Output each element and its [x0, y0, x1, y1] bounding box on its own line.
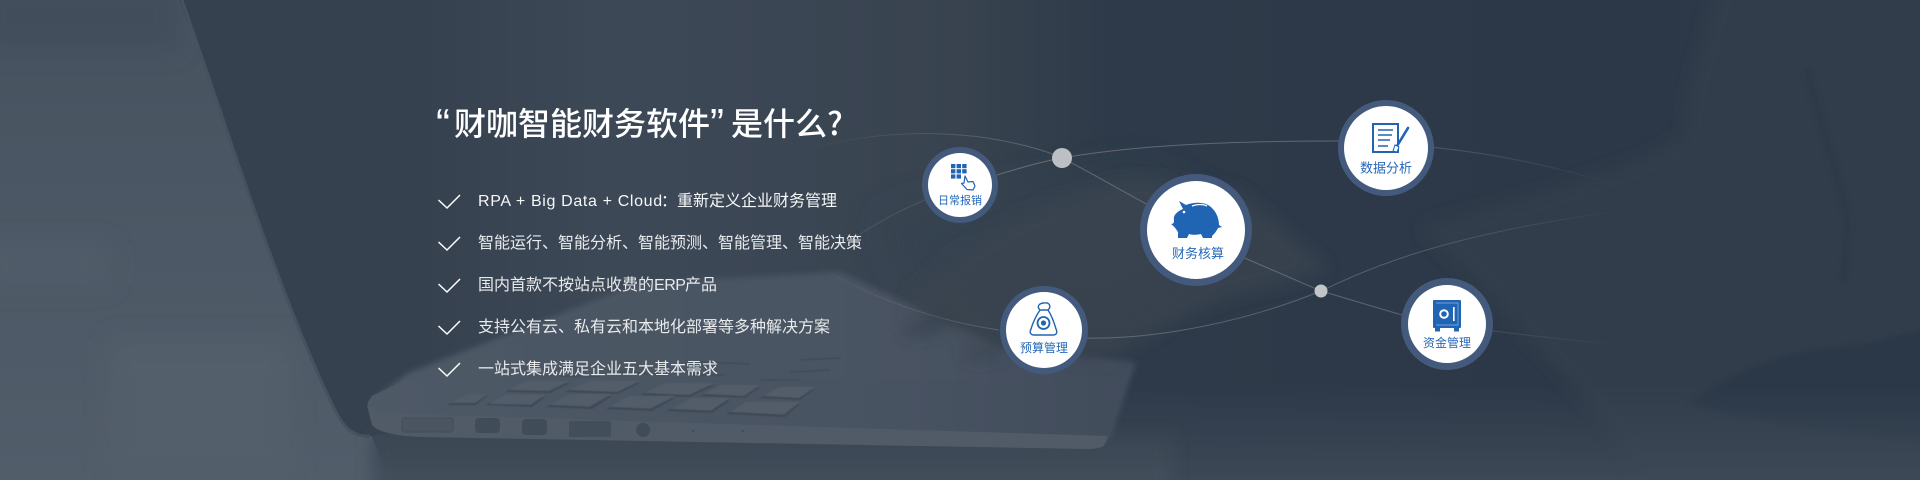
icon: document and pen — [1373, 124, 1411, 152]
background: laptop lid — [180, 0, 372, 436]
icon: piggy bank — [1171, 201, 1222, 238]
background: floor on the right — [1100, 385, 1920, 480]
background: floor below the laptop — [372, 436, 1172, 480]
icon: keypad and hand — [951, 164, 975, 190]
icon: safe — [1433, 300, 1461, 332]
check icon 2 — [438, 237, 460, 250]
title: “ — [436, 100, 450, 147]
background: right hand shadow lines — [1688, 67, 1920, 445]
icon: money bag — [1030, 303, 1057, 335]
background: laptop front edge and ports — [367, 405, 1108, 449]
list item 4: 支持公有云、私有云和本地化部署等多种解决方案 — [478, 318, 830, 336]
label: 数据分析 — [1360, 158, 1412, 176]
background: keyboard keys — [447, 358, 840, 417]
label: 资金管理 — [1423, 334, 1471, 351]
label: 预算管理 — [1020, 339, 1068, 356]
background: right hand silhouette — [1419, 0, 1920, 480]
node dot lower — [1314, 284, 1328, 298]
node: 预算管理 — [1000, 286, 1088, 374]
label: 日常报销 — [938, 192, 982, 208]
list item 5: 一站式集成满足企业五大基本需求 — [478, 360, 718, 378]
background: laptop deck — [372, 272, 1136, 440]
connecting curves — [790, 134, 1612, 344]
node: 数据分析 — [1338, 100, 1434, 196]
list item 3: 产品 — [685, 276, 717, 294]
node: 日常报销 — [922, 147, 998, 223]
feature list — [438, 192, 862, 378]
node: 财务核算 — [1140, 174, 1252, 286]
background: hand over keyboard — [905, 178, 1330, 362]
list item 3: 国内首款不按站点收费的 — [478, 276, 654, 294]
list item 1: ： — [661, 193, 677, 210]
node dot upper — [1052, 148, 1072, 168]
check icon 1 — [438, 195, 460, 208]
list item 1: 重新定义企业财务管理 — [677, 192, 837, 210]
check icon 3 — [438, 279, 460, 292]
list item 1: RPA + Big Data + Cloud — [478, 193, 663, 210]
list item 2: 智能运行、智能分析、智能预测、智能管理、智能决策 — [478, 234, 862, 252]
background: left desk and blurred mug — [0, 0, 390, 480]
list item 3: ERP — [654, 277, 685, 294]
title: 财咖智能财务软件 — [454, 99, 710, 145]
check icon 4 — [438, 321, 460, 334]
label: 财务核算 — [1172, 243, 1224, 262]
title: ” — [710, 100, 724, 147]
background: soft glow over the keyboard hand — [880, 170, 1230, 300]
check icon 5 — [438, 363, 460, 376]
node: 资金管理 — [1401, 278, 1493, 370]
title: 是什么? — [731, 99, 843, 145]
